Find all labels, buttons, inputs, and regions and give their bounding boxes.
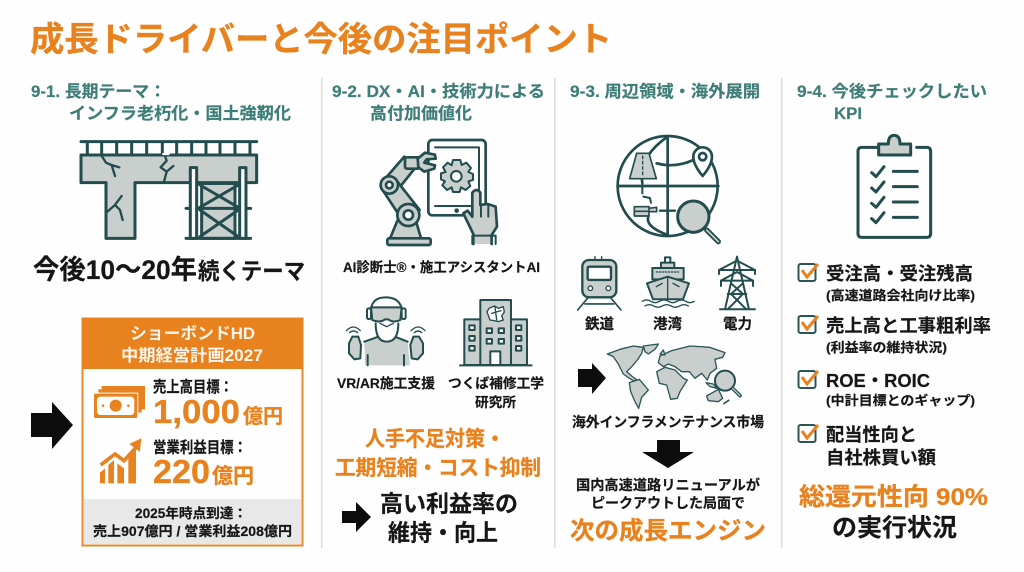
icon: train [578, 257, 621, 310]
callout: labor, schedule, cost [335, 428, 541, 480]
label: power: 電力 [723, 316, 752, 333]
operating profit target: 220 [153, 453, 210, 490]
panel: 9-1 long-term theme [31, 82, 305, 546]
heading: 9-1: 9-1. 長期テーマ： [31, 82, 166, 101]
callout: total payout ratio: の実行状況 [832, 514, 957, 542]
KPI item: orders [798, 263, 975, 303]
plan heading [121, 324, 263, 365]
KPI item: revenue and margin: (利益率の維持状況) [826, 340, 947, 355]
KPI item: ROE ROIC: ROE・ROIC [826, 371, 930, 391]
heading: 9-1 [31, 82, 292, 123]
sales target: 売上高目標： [153, 377, 233, 396]
statement: 10-20 year theme: 今後10〜20年 [33, 255, 197, 285]
icon: world map with magnifier [607, 344, 740, 408]
label: port: 港湾 [653, 315, 682, 333]
icon: globe with road, pin and magnifier [618, 136, 718, 242]
panel: 9-2 DX AI [332, 82, 545, 546]
KPI item: dividend and buyback: 配当性向と [826, 425, 917, 445]
heading: 9-1: インフラ老朽化・国土強靭化 [69, 104, 292, 123]
icon: robot arm with tablet [381, 140, 497, 245]
icon: power pylon [719, 257, 755, 309]
icon: VR headset person [346, 297, 425, 365]
arrow [342, 502, 371, 532]
KPI item: orders: 受注高・受注残高 [826, 263, 973, 284]
sales target [153, 377, 283, 430]
label: VR/AR: VR/AR施工支援 [337, 375, 435, 391]
plan heading: ショーボンドHD [130, 324, 255, 343]
checkbox [798, 316, 818, 333]
KPI item: ROE ROIC: (中計目標とのギャップ) [826, 393, 975, 408]
statement: 10-20 year theme: 続くテーマ [198, 258, 305, 284]
result: high margin [380, 490, 518, 546]
heading: 9-4 [797, 81, 987, 123]
callout: labor, schedule, cost: 人手不足対策・ [365, 428, 505, 451]
icon: ship [642, 257, 694, 307]
callout: total payout ratio: 総還元性向 90% [799, 483, 988, 511]
text: domestic peak-out: 国内高速道路リニューアルが [576, 477, 760, 493]
icon: banknotes [94, 386, 145, 418]
panel: 9-4 KPI [797, 81, 991, 542]
KPI item: ROE ROIC [798, 371, 975, 408]
statement: 10-20 year theme [33, 255, 305, 285]
KPI item: revenue and margin: 売上高と工事粗利率 [826, 316, 991, 336]
title: 成長ドライバーと今後の注目ポイント [30, 21, 612, 59]
heading: 9-2: 9-2. DX・AI・技術力による [332, 82, 545, 101]
label: railway: 鉄道 [585, 315, 614, 333]
KPI item: dividend and buyback: 自社株買い額 [826, 448, 936, 468]
operating profit target: 億円 [212, 465, 254, 488]
result: high margin: 高い利益率の [380, 490, 518, 516]
checkbox [798, 264, 818, 281]
icon: damaged bridge with scaffold [81, 142, 257, 238]
result: high margin: 維持・向上 [388, 520, 498, 546]
plan heading: 中期経営計画2027 [121, 346, 263, 365]
heading: 9-2 [332, 82, 545, 123]
icon: clipboard checklist [858, 135, 931, 237]
label: overseas market: 海外インフラメンテナンス市場 [572, 414, 764, 430]
KPI item: orders: (高速道路会社向け比率) [826, 288, 975, 303]
label: AI tools: AI診断士®・施工アシスタントAI [343, 259, 540, 275]
heading: 9-4: 9-4. 今後チェックしたい [797, 81, 987, 101]
operating profit target [153, 438, 254, 490]
arrow [642, 440, 694, 468]
KPI item: revenue and margin [798, 316, 991, 355]
2025 status: 2025年時点到達： [135, 505, 247, 521]
KPI item: dividend and buyback [798, 425, 936, 468]
operating profit target: 営業利益目標： [153, 438, 247, 456]
sales target: 1,000 [153, 393, 240, 430]
callout: total payout ratio [799, 483, 988, 542]
callout: next growth engine: 次の成長エンジン [570, 517, 766, 545]
text: domestic peak-out: ピークアウトした局面で [591, 495, 745, 511]
sales target: 億円 [243, 405, 283, 428]
panel: mid-term plan [82, 318, 303, 546]
checkbox [798, 371, 818, 388]
heading: 9-3: 9-3. 周辺領域・海外展開 [570, 82, 760, 101]
label: Tsukuba lab: 研究所 [475, 395, 517, 410]
text: domestic peak-out [576, 477, 760, 511]
heading: 9-2: 高付加価値化 [370, 103, 473, 123]
checkbox [798, 425, 818, 442]
icon: growth chart [100, 439, 141, 483]
2025 status: 売上907億円 / 営業利益208億円 [93, 523, 292, 539]
heading: 9-4: KPI [834, 105, 862, 123]
callout: labor, schedule, cost: 工期短縮・コスト抑制 [335, 457, 541, 480]
arrow [578, 363, 606, 394]
panel: 9-3 adjacent and overseas [570, 82, 766, 545]
label: Tsukuba lab: つくば補修工学 [448, 375, 544, 391]
2025 status [93, 505, 292, 539]
icon: research institute building [460, 300, 532, 365]
arrow [31, 402, 73, 449]
label: Tsukuba lab [448, 375, 544, 410]
